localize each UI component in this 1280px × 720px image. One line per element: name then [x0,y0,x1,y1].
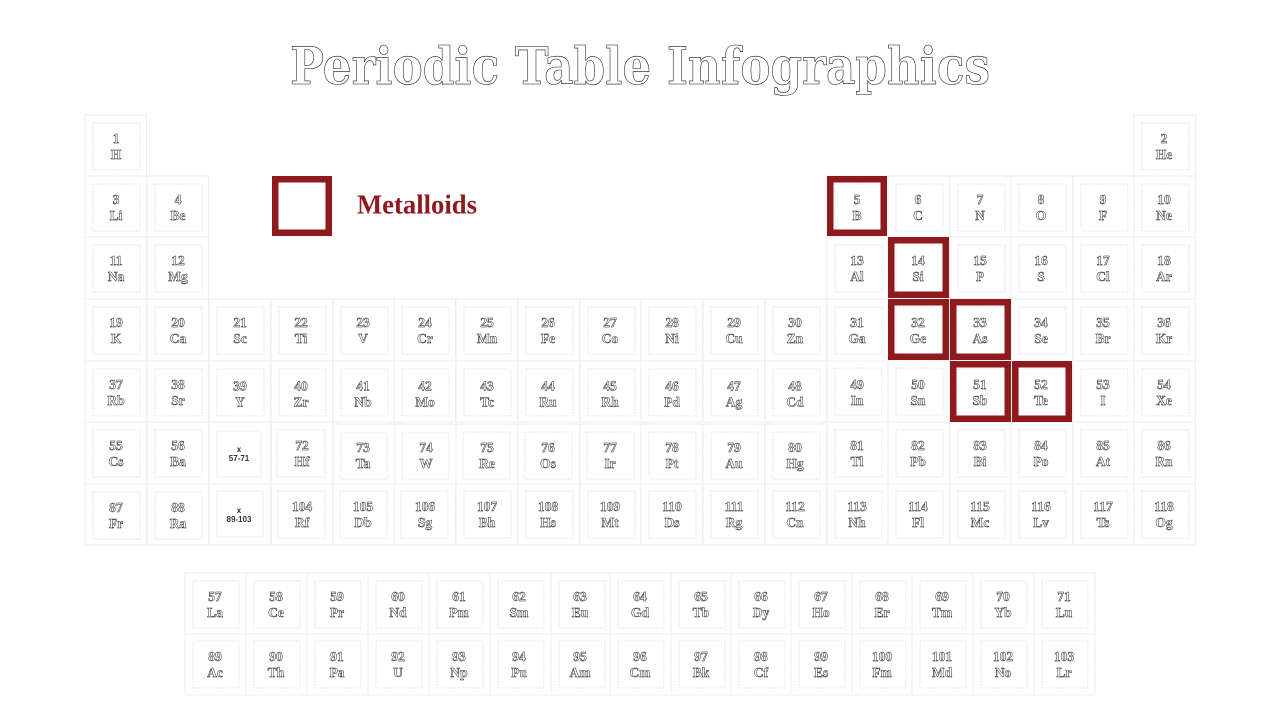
row 6: 76 [541,440,555,455]
row 6: 80 [788,440,802,455]
row 7: 112 [785,499,805,514]
actinides: Am [570,665,591,680]
row 3: Na [108,269,124,284]
actinides: No [995,665,1011,680]
row 5: Y [235,394,245,410]
row 7: Bh [479,515,496,530]
row 5: Sb [972,393,988,408]
lanthanides: Tb [693,605,709,620]
row 4: 36 [1157,315,1171,330]
row 6: Pt [666,456,679,471]
row 4: Se [1034,331,1048,346]
lanthanides: Tm [932,605,953,620]
row 4: As [972,331,988,346]
row 4: Zn [787,331,804,346]
row 5: Rb [107,393,125,408]
row 7: 87 [109,500,123,515]
actinides: 102 [993,649,1013,664]
row 1: He [1156,147,1172,162]
row 3: 18 [1157,253,1171,268]
row 2: Be [170,208,186,223]
row 5: Cd [786,394,804,410]
row 7: Mc [971,515,989,530]
row 5: Mo [415,394,435,410]
lanthanides: 62 [512,589,526,604]
main periodic table [85,115,1196,545]
row 2: C [913,208,923,223]
lanthanides: 71 [1057,589,1071,604]
lanthanides: Eu [572,605,589,620]
row 7: 113 [847,499,867,514]
row 1 [85,115,1196,176]
row 3: Cl [1096,269,1110,284]
row 4: Cu [725,331,743,346]
row 6: x [237,445,242,454]
row 2: 4 [175,192,182,207]
row 7: 109 [600,499,620,514]
row 5: 46 [665,378,679,394]
lanthanides: 57 [208,589,222,604]
row 5: 47 [727,378,741,394]
row 3: Al [850,269,864,284]
row 6 [85,422,1196,484]
row 5: Rh [601,394,619,410]
row 6: 73 [356,440,370,455]
row 4: Co [602,331,618,346]
row 6: 74 [419,440,433,455]
actinides: 98 [754,649,768,664]
lanthanides: 67 [814,589,828,604]
row 7: Ds [664,515,680,530]
row 2: B [852,208,862,223]
actinides: 95 [573,649,587,664]
row 5: 50 [911,377,925,392]
lanthanides: 69 [935,589,949,604]
row 7: Rg [726,515,742,530]
row 6: At [1096,454,1111,469]
actinides: Bk [693,665,710,680]
row 4: 24 [418,315,432,330]
actinides: Pu [511,665,527,680]
row 5: 40 [294,378,308,394]
row 7: 88 [171,500,185,515]
row 4: Fe [541,331,555,346]
row 7: 114 [908,499,928,514]
row 6: Tl [851,454,864,469]
actinides: 101 [932,649,952,664]
row 5: 51 [973,377,987,392]
lanthanides: 60 [391,589,405,604]
row 4: Kr [1156,331,1172,346]
row 4: Ni [665,331,679,346]
actinides [185,634,1095,695]
row 7: Mt [601,515,619,530]
actinides: Fm [872,665,892,680]
row 5: Sr [171,393,185,408]
lanthanides: 66 [754,589,768,604]
row 6: Au [725,456,743,471]
title: Periodic Table Infographics [290,37,990,97]
row 6: 83 [973,438,987,453]
lanthanides: Dy [753,605,769,620]
row 6: Hf [294,454,310,469]
row 2: 7 [977,192,984,207]
row 5: Zr [294,394,309,410]
row 6: Po [1034,454,1049,469]
row 6: 77 [603,440,617,455]
row 7: 107 [477,499,497,514]
actinides: Pa [330,665,345,680]
row 5: 48 [788,378,802,394]
row 3: Ar [1156,269,1172,284]
row 6: Os [540,456,556,471]
actinides: 99 [814,649,828,664]
row 7: 116 [1031,499,1051,514]
row 5: Pd [664,394,680,410]
row 1: H [111,147,122,162]
row 6: Bi [974,454,987,469]
lanthanide and actinide table [185,573,1095,695]
row 5: Te [1034,393,1048,408]
row 7: Nh [848,515,866,530]
row 4: 22 [294,315,308,330]
lanthanides: Yb [994,605,1012,620]
row 3 [85,237,1196,299]
actinides: Np [450,665,468,680]
row 3: Mg [168,269,188,284]
row 5: 52 [1034,377,1048,392]
actinides: 97 [694,649,708,664]
row 5: Ag [726,394,742,410]
row 5: 39 [233,378,247,394]
row 5: Xe [1156,393,1172,408]
row 4: Ge [910,331,926,346]
row 4: Br [1096,331,1111,346]
lanthanides: Lu [1056,605,1073,620]
row 2: F [1099,208,1107,223]
row 4: Sc [233,331,247,346]
row 6: 72 [295,438,309,453]
lanthanides: 64 [633,589,647,604]
row 2: 9 [1100,192,1107,207]
row 5: 45 [603,378,617,394]
row 4: Ga [848,331,866,346]
row 7: Sg [418,515,432,530]
legend swatch: metalloids [275,179,329,233]
row 2: 3 [113,192,120,207]
row 5: 54 [1157,377,1171,392]
row 4: 34 [1034,315,1048,330]
lanthanides: Gd [631,605,649,620]
row 5: 38 [171,377,185,392]
actinides: 103 [1054,649,1074,664]
row 4: 23 [356,315,370,330]
lanthanides: Nd [389,605,407,620]
row 3: 14 [911,253,925,268]
actinides: Ac [207,665,223,680]
row 3: 16 [1034,253,1048,268]
row 1: 2 [1161,131,1168,146]
row 4: Cr [417,331,433,346]
row 7: 111 [725,499,744,514]
actinides: 89 [208,649,222,664]
row 7: 89-103 [227,515,252,524]
row 4: Ti [295,331,308,346]
lanthanides: Ho [812,605,830,620]
row 6: Ir [604,456,616,471]
row 5: 41 [356,378,370,394]
lanthanides: 70 [996,589,1010,604]
row 6: 55 [109,438,123,453]
actinides: Th [268,665,285,680]
row 6: Ta [356,456,371,471]
row 5: 42 [418,378,432,394]
row 3: 12 [171,253,185,268]
row 2 [85,176,1196,237]
row 4: 25 [480,315,494,330]
lanthanides: La [207,605,223,620]
row 6: 56 [171,438,185,453]
row 7: Db [354,515,372,530]
row 2: N [975,208,985,223]
row 4: 27 [603,315,617,330]
lanthanides: 58 [269,589,283,604]
row 3: Si [912,269,924,284]
lanthanides: 63 [573,589,587,604]
row 6: 85 [1096,438,1110,453]
row 4: Ca [170,331,186,346]
row 6: 78 [665,440,679,455]
row 4: K [111,331,122,346]
row 6: 84 [1034,438,1048,453]
row 2: 10 [1157,192,1171,207]
row 4: 33 [973,315,987,330]
row 7: Ts [1096,515,1110,530]
row 2: 6 [915,192,922,207]
actinides: Es [814,665,828,680]
row 2: O [1036,208,1046,223]
row 5: 37 [109,377,123,392]
row 7: 105 [353,499,373,514]
row 5: 44 [541,378,555,394]
row 4: 29 [727,315,741,330]
row 7: Fr [109,516,123,531]
row 6: 57-71 [229,454,250,463]
row 5: 43 [480,378,494,394]
row 2: 5 [854,192,861,207]
row 5: In [851,393,864,408]
row 7: Cn [786,515,804,530]
row 7: 104 [292,499,312,514]
row 4: 26 [541,315,555,330]
row 6: 82 [911,438,925,453]
actinides: Cf [754,665,769,680]
row 4: 28 [665,315,679,330]
lanthanides: 61 [452,589,466,604]
row 4: 30 [788,315,802,330]
row 5: Tc [480,394,494,410]
row 5: Nb [354,394,372,410]
row 4: 21 [233,315,247,330]
row 7: Og [1155,515,1173,530]
row 4: Mn [477,331,498,346]
row 5: 53 [1096,377,1110,392]
row 5: Ru [539,394,557,410]
row 3: 11 [110,253,123,268]
actinides: 96 [633,649,647,664]
row 7: Hs [540,515,556,530]
row 7: 115 [970,499,990,514]
actinides: U [393,665,403,680]
row 2: Li [110,208,123,223]
lanthanides: 65 [694,589,708,604]
lanthanides: Pr [330,605,344,620]
row 5: Sn [910,393,926,408]
lanthanides: Sm [510,605,529,620]
row 4: 35 [1096,315,1110,330]
row 7: 110 [662,499,682,514]
row 6: 86 [1157,438,1171,453]
row 3: 15 [973,253,987,268]
row 4: V [358,331,368,346]
actinides: 100 [872,649,892,664]
actinides: Md [932,665,953,680]
row 4: 19 [109,315,123,330]
row 7: x [237,506,242,515]
actinides: 92 [391,649,405,664]
lanthanides [185,573,1095,634]
legend label: metalloids: Metalloids [357,190,477,220]
row 6: Re [479,456,495,471]
actinides: 94 [512,649,526,664]
row 1: 1 [113,131,120,146]
row 3: 17 [1096,253,1110,268]
row 7: 118 [1154,499,1174,514]
row 6: Ba [170,454,186,469]
row 6: Pb [910,454,926,469]
lanthanides: Pm [449,605,469,620]
row 7 [85,484,1196,545]
row 6: 75 [480,440,494,455]
row 5: I [1100,393,1106,408]
row 3: S [1037,269,1045,284]
actinides: 90 [269,649,283,664]
row 5 [85,361,1196,422]
row 6: 81 [850,438,864,453]
row 4: 20 [171,315,185,330]
row 6: Hg [786,456,804,471]
row 6: W [419,456,433,471]
row 4: 32 [911,315,925,330]
row 7: 106 [415,499,435,514]
lanthanides: 59 [330,589,344,604]
row 7: Ra [170,516,186,531]
lanthanides: 68 [875,589,889,604]
row 6: Cs [108,454,124,469]
row 7: Lv [1033,515,1049,530]
lanthanides: Ce [268,605,284,620]
lanthanides: Er [874,605,890,620]
metalloid highlight frames [830,179,1069,419]
row 4: 31 [850,315,864,330]
row 7: Fl [912,515,924,530]
row 7: 117 [1093,499,1113,514]
row 2: Ne [1156,208,1172,223]
actinides: 93 [452,649,466,664]
actinides: Cm [630,665,651,680]
row 6: Rn [1155,454,1173,469]
row 3: P [976,269,984,284]
row 4 [85,299,1196,361]
row 2: 8 [1038,192,1045,207]
actinides: Lr [1056,665,1072,680]
row 7: 108 [538,499,558,514]
actinides: 91 [330,649,344,664]
row 3: 13 [850,253,864,268]
row 6: 79 [727,440,741,455]
row 5: 49 [850,377,864,392]
row 7: Rf [295,515,310,530]
